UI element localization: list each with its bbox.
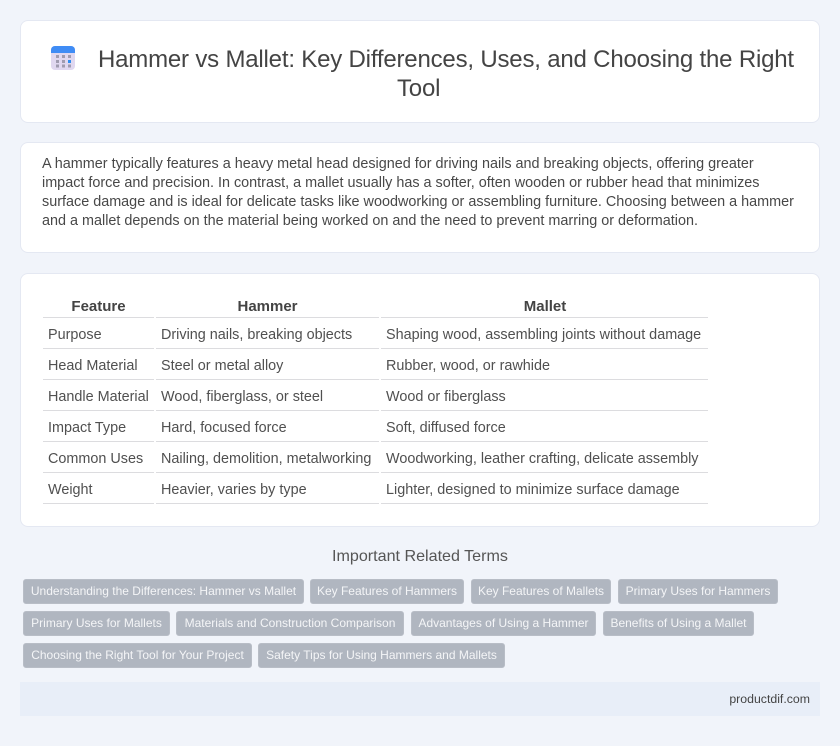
- title: [98, 46, 794, 102]
- intro paragraph: impact force and precision. In contrast, a mallet usually has a softer, often wooden or rubber head that minimizes: [42, 175, 760, 191]
- footer bar: [20, 682, 820, 716]
- row: weight: Weight: [48, 482, 93, 498]
- related term tags: Choosing the Right Tool for Your Project: [31, 648, 244, 662]
- table header row: Hammer: [237, 298, 298, 315]
- row: impact type: Hard, focused force: [161, 420, 287, 436]
- related term tags: Primary Uses for Mallets: [31, 616, 162, 630]
- table header row: Mallet: [524, 298, 566, 315]
- row: impact type: [48, 420, 506, 436]
- comparison table: [43, 298, 708, 504]
- row: impact type: Impact Type: [48, 420, 126, 436]
- row: weight: Heavier, varies by type: [161, 482, 307, 498]
- intro paragraph: A hammer typically features a heavy metal head designed for driving nails and breaking objects, offering greater: [42, 156, 754, 172]
- panel: title card: [20, 20, 820, 123]
- panel: intro text: [20, 142, 820, 253]
- row: common uses: [48, 451, 698, 467]
- related term tags: Understanding the Differences: Hammer vs Mallet: [31, 584, 296, 598]
- related term tags: Key Features of Hammers: [317, 584, 457, 598]
- row: head material: [48, 358, 550, 374]
- intro paragraph: surface damage and is ideal for delicate tasks like woodworking or assembling furniture. Choosing between a hammer: [42, 194, 794, 210]
- related term tags: Benefits of Using a Mallet: [610, 616, 747, 630]
- panel: comparison table: [20, 273, 820, 527]
- footer site name: productdif.com: [729, 692, 810, 706]
- table header row: [71, 298, 566, 315]
- row: head material: Head Material: [48, 358, 138, 374]
- row: common uses: Common Uses: [48, 451, 143, 467]
- row: purpose: [48, 327, 701, 343]
- row: handle material: Handle Material: [48, 389, 149, 405]
- related term tags: [23, 579, 778, 668]
- row: head material: Steel or metal alloy: [161, 358, 283, 374]
- heading: important related terms: Important Related Terms: [332, 547, 508, 565]
- row: handle material: Wood, fiberglass, or steel: [161, 389, 323, 405]
- title: Tool: [397, 75, 440, 102]
- row: weight: [48, 482, 680, 498]
- row: impact type: Soft, diffused force: [386, 420, 506, 436]
- row: purpose: Driving nails, breaking objects: [161, 327, 352, 343]
- title: Hammer vs Mallet: Key Differences, Uses, and Choosing the Right: [98, 46, 794, 73]
- row: common uses: Nailing, demolition, metalworking: [161, 451, 371, 467]
- row: handle material: Wood or fiberglass: [386, 389, 506, 405]
- related term tags: Advantages of Using a Hammer: [418, 616, 589, 630]
- icon: calendar grid: [51, 46, 75, 70]
- related term tags: Key Features of Mallets: [478, 584, 604, 598]
- intro paragraph: [42, 156, 794, 229]
- row: common uses: Woodworking, leather crafting, delicate assembly: [386, 451, 698, 467]
- intro paragraph: and a mallet depends on the material being worked on and the need to prevent marring or deformation.: [42, 213, 698, 229]
- related term tags: Primary Uses for Hammers: [626, 584, 770, 598]
- related term tags: Safety Tips for Using Hammers and Mallets: [266, 648, 497, 662]
- row: handle material: [48, 389, 506, 405]
- row: weight: Lighter, designed to minimize surface damage: [386, 482, 680, 498]
- row: head material: Rubber, wood, or rawhide: [386, 358, 550, 374]
- row: purpose: Purpose: [48, 327, 102, 343]
- related term tags: Materials and Construction Comparison: [185, 616, 395, 630]
- table header row: Feature: [71, 298, 126, 315]
- row: purpose: Shaping wood, assembling joints without damage: [386, 327, 701, 343]
